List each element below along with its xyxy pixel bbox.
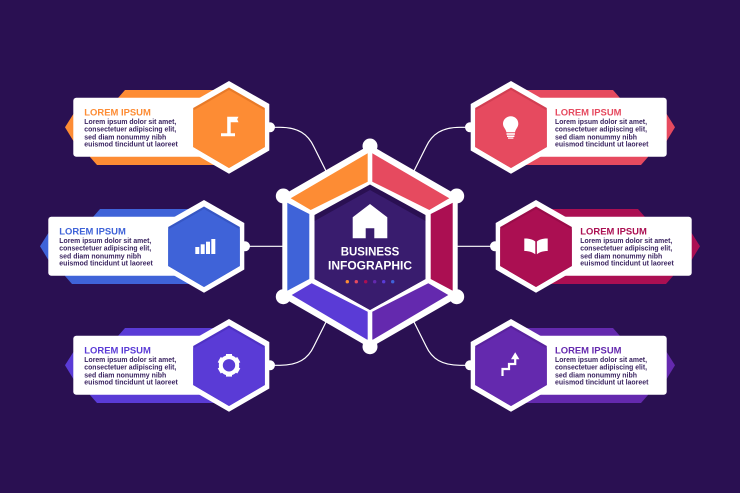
text block: crimson: euismod tincidunt ut laoreet xyxy=(580,261,674,268)
central hexagon xyxy=(276,138,464,354)
panel: violet gear xyxy=(65,319,275,412)
segment: blue xyxy=(287,203,309,291)
title: BUSINESS xyxy=(341,247,400,259)
heading: orange: LOREM IPSUM xyxy=(84,108,151,119)
text block: blue xyxy=(59,238,153,268)
segment: crimson xyxy=(431,203,453,291)
icon: open book xyxy=(524,238,548,254)
text block: crimson: Lorem ipsum dolor sit amet, xyxy=(580,238,672,245)
text block: red: consectetuer adipiscing elit, xyxy=(555,127,647,134)
icon: house xyxy=(353,204,387,238)
text block: orange xyxy=(84,119,178,149)
heading: red: LOREM IPSUM xyxy=(555,108,622,119)
colour dots xyxy=(346,280,394,283)
text block: purple: euismod tincidunt ut laoreet xyxy=(555,380,649,387)
heading: purple: LOREM IPSUM xyxy=(555,346,622,356)
text block: blue: Lorem ipsum dolor sit amet, xyxy=(59,238,151,245)
panel: orange flag xyxy=(65,81,275,174)
text block: violet xyxy=(84,357,178,387)
text block: purple: consectetuer adipiscing elit, xyxy=(555,365,647,372)
heading: violet: LOREM IPSUM xyxy=(84,346,151,356)
heading: blue: LOREM IPSUM xyxy=(59,226,126,238)
segment: purple xyxy=(372,283,448,340)
icon: flag xyxy=(221,117,238,136)
icon: gear xyxy=(218,354,240,377)
text block: red xyxy=(555,119,649,149)
text block: orange: sed diam nonummy nibh xyxy=(84,134,166,141)
inner hexagon xyxy=(314,184,426,310)
panel: blue chart xyxy=(40,200,250,293)
text block: purple xyxy=(555,357,649,387)
text block: violet: euismod tincidunt ut laoreet xyxy=(84,380,178,387)
text block: purple: Lorem ipsum dolor sit amet, xyxy=(555,357,647,364)
text block: blue: sed diam nonummy nibh xyxy=(59,253,141,260)
icon: stairs arrow xyxy=(502,352,519,376)
text block: orange: consectetuer adipiscing elit, xyxy=(84,127,176,134)
panel: purple stairs xyxy=(465,319,675,412)
text block: violet: sed diam nonummy nibh xyxy=(84,372,166,379)
text block: red: Lorem ipsum dolor sit amet, xyxy=(555,119,647,126)
text block: red: sed diam nonummy nibh xyxy=(555,134,637,141)
text block: crimson xyxy=(580,238,674,268)
connector lines xyxy=(245,127,495,365)
text block: blue: consectetuer adipiscing elit, xyxy=(59,246,151,253)
heading: crimson: LOREM IPSUM xyxy=(580,226,647,238)
title: INFOGRAPHIC xyxy=(328,260,412,272)
text block: violet: consectetuer adipiscing elit, xyxy=(84,365,176,372)
segment: violet xyxy=(292,283,368,340)
text block: violet: Lorem ipsum dolor sit amet, xyxy=(84,357,176,364)
segment: red xyxy=(372,153,449,210)
text block: red: euismod tincidunt ut laoreet xyxy=(555,142,649,149)
segment: orange xyxy=(291,153,368,210)
node dots xyxy=(276,138,464,354)
title xyxy=(328,247,412,272)
text block: purple: sed diam nonummy nibh xyxy=(555,372,637,379)
panel: crimson book xyxy=(490,200,700,293)
text block: blue: euismod tincidunt ut laoreet xyxy=(59,261,153,268)
text block: crimson: sed diam nonummy nibh xyxy=(580,253,662,260)
panel: red bulb xyxy=(465,81,675,174)
text block: orange: Lorem ipsum dolor sit amet, xyxy=(84,119,176,126)
text block: orange: euismod tincidunt ut laoreet xyxy=(84,142,178,149)
text block: crimson: consectetuer adipiscing elit, xyxy=(580,246,672,253)
icon: bar chart xyxy=(195,239,215,254)
icon: light bulb xyxy=(503,116,518,139)
